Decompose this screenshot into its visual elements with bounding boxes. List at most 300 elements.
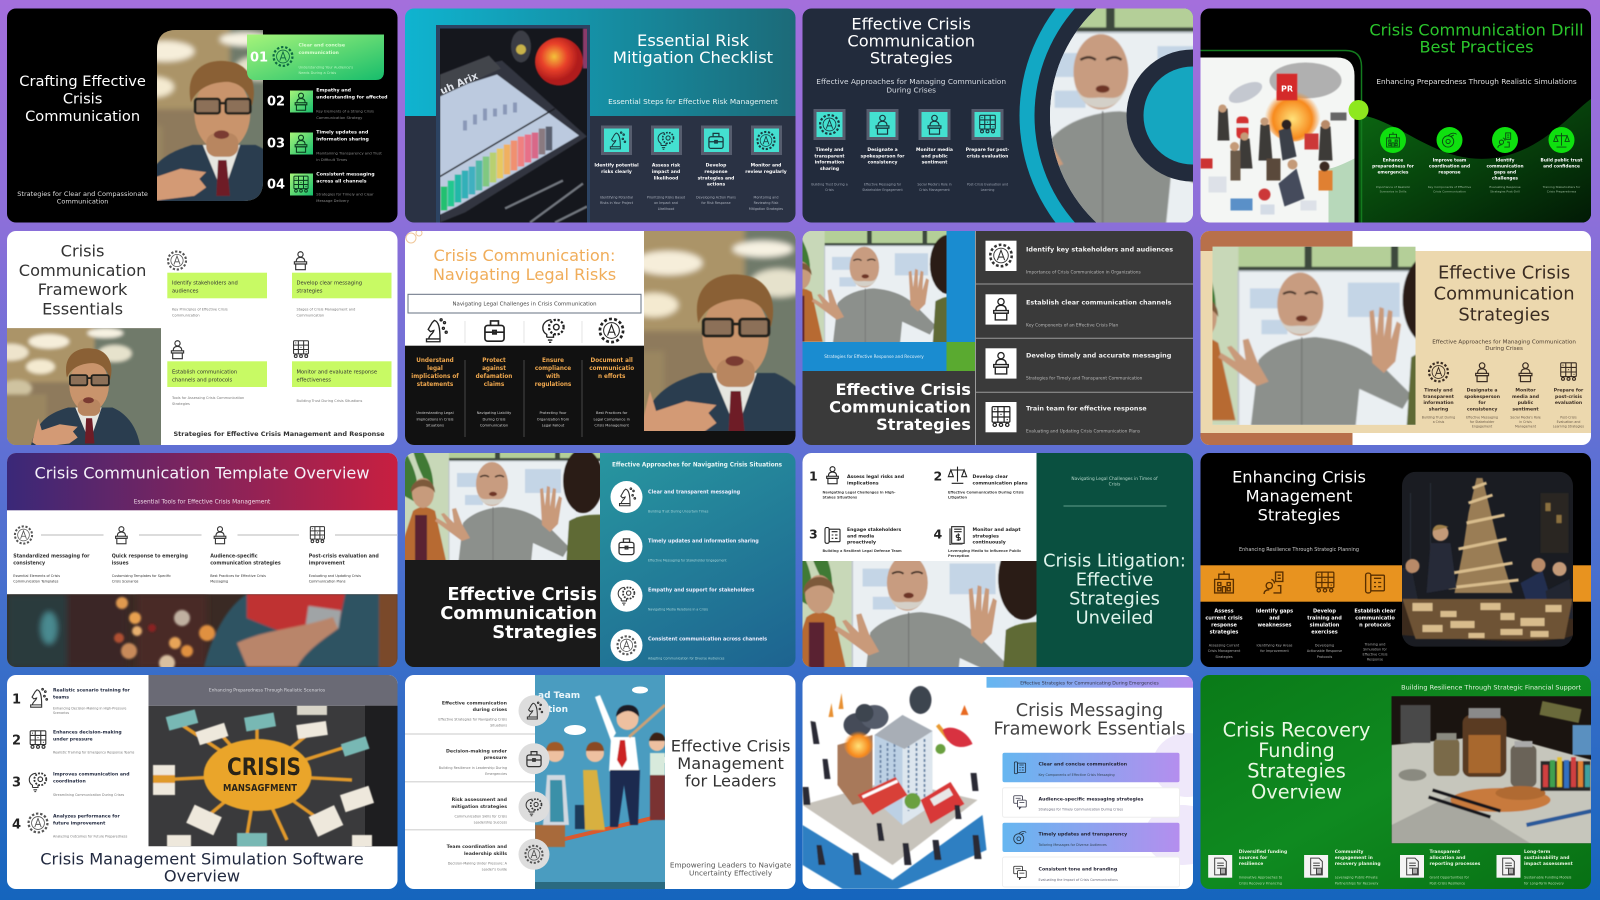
panel: crisis communication framework essentials (7, 231, 398, 445)
title: Strategies (876, 415, 971, 434)
card: clear communication: Clear and concise communication (1038, 762, 1127, 768)
step notes: Management (1515, 425, 1537, 429)
item: diversified funding: Innovative Approaches to (1239, 876, 1282, 880)
title: Crisis Communication: (433, 246, 616, 265)
item 1: teams (53, 695, 69, 701)
panel: crisis recovery funding strategies overview (1200, 675, 1592, 889)
illustration outline (1200, 50, 1362, 222)
panel: crafting effective crisis communication (7, 7, 400, 228)
step notes: Legal Compliance in (594, 417, 630, 421)
step labels: Understand (416, 358, 454, 364)
title: Navigating Legal Risks (433, 265, 616, 284)
list headings: Effective communication (442, 700, 507, 706)
title: Framework (38, 280, 128, 299)
step notes: Key Components of Effective (1428, 185, 1471, 189)
step labels: for (1478, 400, 1487, 406)
item 03: 03 (267, 136, 285, 152)
step notes: Communication Plans (309, 579, 346, 583)
list headings: Team coordination and (447, 844, 507, 850)
step labels: Prepare for post- (966, 147, 1009, 153)
step 2: 2 (934, 469, 942, 484)
item 03: information sharing (316, 136, 369, 142)
step labels: Standardized messaging for (13, 554, 90, 560)
item 04: Consistent messaging (316, 172, 375, 178)
item 4: future improvement (53, 821, 106, 827)
banner: Effective Strategies for Communicating During Emergencies (1020, 680, 1159, 686)
step notes: a Crisis (1433, 420, 1445, 424)
step labels: Enhance (1383, 158, 1403, 164)
step labels: emergencies (1378, 170, 1409, 176)
panel: strategies on beige (1117, 217, 1592, 461)
step notes: Engagement (1472, 425, 1493, 429)
photo: crisis management sign: MANSAGFMENT (223, 783, 297, 794)
step 1: Navigating Legal Challenges in High- (822, 490, 896, 494)
step 3: 3 (809, 526, 818, 541)
step labels: Identify potential (594, 162, 639, 168)
item 04: 04 (267, 178, 285, 192)
panel: crisis litigation (745, 453, 1194, 722)
item: identify stakeholders: Key Principles of Effective Crisis (172, 307, 228, 311)
item: monitor and evaluate: Monitor and evaluate response (296, 369, 377, 375)
banner (986, 677, 1194, 688)
subtitle: Uncertainty Effectively (689, 869, 773, 878)
step labels: Establish clear (1354, 609, 1396, 615)
title: Strategies (1247, 760, 1346, 783)
item: community engagement: Partnerships for Recovery (1335, 881, 1378, 885)
card: updates: Tailoring Messages for Diverse Audiences (1038, 843, 1107, 847)
icon row (426, 319, 623, 343)
title: Communication (19, 261, 146, 280)
step 2: Effective Communication During Crisis (948, 490, 1024, 494)
step notes: Crisis Preparedness (1547, 190, 1577, 194)
title: Effective Crisis (1438, 262, 1570, 283)
icon tiles (814, 109, 1004, 140)
step labels: exercises (1311, 630, 1338, 636)
step labels: public (1518, 400, 1534, 406)
icons (1429, 363, 1576, 382)
step labels: legal (427, 366, 443, 372)
step notes: Effective Messaging (1466, 416, 1498, 420)
step notes: Understanding Legal (416, 411, 454, 415)
title: Crisis Management Simulation Software (40, 849, 364, 868)
step 4: 4 (934, 526, 942, 541)
grey header band (148, 675, 398, 706)
item: diversified funding: resilience (1239, 861, 1263, 867)
step labels: consistency (1467, 406, 1497, 412)
subtitle: During Crises (886, 86, 936, 95)
step labels: strategies (1210, 630, 1238, 636)
title: Communication (1434, 284, 1575, 304)
subtitle box (408, 294, 641, 313)
step labels: Build public trust (1541, 158, 1582, 164)
card: updates: Timely updates and transparency (1038, 832, 1127, 838)
step notes: on Impact and (654, 201, 678, 205)
subtitle box: Navigating Legal Challenges in Crisis Communication (453, 301, 596, 307)
title: for Leaders (685, 772, 776, 791)
step notes: Risks in Your Project (600, 201, 634, 205)
item 03: Maintaining Transparency and Trust (316, 152, 382, 156)
item: identify stakeholders (167, 251, 267, 317)
row: messaging: Clear and transparent messaging (648, 490, 741, 496)
row: stakeholders (986, 241, 1173, 275)
list notes: Communication Skills for Crisis (454, 814, 507, 818)
step notes: Legal Fallout (542, 424, 565, 428)
step 4 (934, 526, 1021, 558)
step notes: Identifying Potential (600, 196, 633, 200)
list notes: Effective Strategies for Navigating Crisis (438, 718, 507, 722)
round icons (1380, 127, 1574, 153)
step labels: and public (921, 153, 948, 159)
step notes: Strategies (1215, 655, 1233, 659)
item: transparent allocation: reporting processes (1430, 861, 1481, 867)
step notes: Crisis Scenarios (112, 579, 139, 583)
step labels: Develop (706, 162, 727, 168)
step labels: Monitor media (916, 147, 953, 153)
step labels: Improve team (1433, 158, 1467, 164)
right circle (1126, 50, 1193, 182)
highlighted item 01: Needs During a Crisis (298, 71, 336, 75)
row: consistency: Consistent communication across channels (648, 637, 767, 643)
photo: man with glasses (157, 30, 263, 201)
photo: speaker (802, 231, 946, 342)
step labels: consistency (13, 561, 46, 567)
step notes: Likelihood (658, 207, 674, 211)
step notes: Messaging (210, 579, 228, 583)
item: channels and protocols (167, 341, 267, 406)
step labels: impact and (652, 169, 680, 175)
step 3: proactively (847, 540, 876, 546)
step labels: Designate a (867, 147, 898, 153)
card: audience-specific: Strategies for Timely Communication During Crises (1038, 808, 1123, 812)
timeline (15, 526, 397, 544)
item: channels and protocols: Tools for Assessing Crisis Communication (171, 396, 244, 400)
photo: speaker (802, 561, 1036, 667)
step notes: Mitigation Strategies (749, 207, 783, 211)
icon band (1215, 571, 1384, 594)
item: messaging strategies: Communication (296, 313, 324, 317)
panel: enhancing crisis management strategies (1200, 453, 1592, 667)
item: messaging strategies: Develop clear messaging (296, 281, 362, 287)
step labels: weaknesses (1258, 623, 1292, 629)
item: monitor and evaluate: effectiveness (296, 377, 331, 383)
step 3: Engage stakeholders (847, 527, 902, 533)
step 3: and media (847, 533, 874, 539)
title: Communication (25, 108, 140, 125)
panel: strategies with dark list (747, 211, 1194, 445)
panel: crisis communication drill best practices (1200, 8, 1592, 222)
step notes: Protocols (1317, 655, 1332, 659)
step labels: communicatio (589, 366, 634, 372)
step labels: spokesperson (1464, 394, 1500, 400)
step notes: Crisis (825, 188, 834, 192)
step notes: Evaluating Response (1489, 185, 1521, 189)
step 1: Assess legal risks and (847, 474, 904, 480)
item: transparent allocation: Transparent (1430, 849, 1461, 855)
card: audience-specific (1002, 788, 1180, 817)
step labels: Timely and (816, 147, 843, 153)
step labels: and (1269, 616, 1280, 622)
step labels: post-crisis (1555, 394, 1582, 400)
row: consistency (610, 629, 767, 661)
step labels: Identify gaps (1256, 609, 1293, 615)
item: long-term sustainability: Sustainable Funding Models (1524, 876, 1572, 880)
panel: crisis communication template overview (7, 453, 398, 671)
illustration: city disaster (802, 686, 986, 889)
illustration: business team climbing: ad Team (538, 691, 580, 701)
row: updates (610, 530, 759, 562)
title: Crisis Recovery (1223, 718, 1370, 741)
item: long-term sustainability: Long-term (1524, 849, 1551, 855)
list notes: Building Resilience in Leadership During (439, 766, 507, 770)
item 3: 3 (12, 776, 21, 791)
row: messaging (986, 348, 1172, 382)
item: diversified funding (1208, 849, 1287, 885)
list headings: Risk assessment and (452, 797, 507, 803)
step labels: Designate a (1467, 388, 1498, 394)
subtitle: Enhancing Resilience Through Strategic Planning (1239, 547, 1359, 553)
item: identify stakeholders: Communication (172, 313, 200, 317)
row: messaging: Develop timely and accurate messaging (1026, 352, 1172, 360)
colour blocks and strapline (802, 231, 976, 371)
step labels: implications of (411, 374, 459, 380)
item 1: 1 (12, 692, 21, 707)
card: tone and branding (1002, 857, 1180, 887)
title: Communication (829, 397, 971, 416)
step labels: Timely and (1424, 388, 1453, 394)
item: long-term sustainability: impact assessment (1524, 861, 1574, 867)
step labels: current crisis (1205, 616, 1243, 622)
step labels: regulations (535, 382, 572, 388)
step labels: Quick response to emerging (112, 554, 189, 560)
step notes: Post-Crisis Evaluation and (967, 182, 1008, 186)
step notes: Organization from (537, 417, 570, 421)
item: community engagement: Community (1335, 849, 1364, 855)
step notes: Situations (426, 424, 444, 428)
item: diversified funding: Crisis Recovery Financing (1239, 881, 1282, 885)
item: community engagement (1304, 849, 1381, 885)
item 2: Realistic Training for Emergency Response Teams (53, 750, 135, 754)
step notes: Crisis Management (1208, 649, 1241, 653)
step labels: media and (1512, 394, 1539, 400)
highlighted item 01: 01 (250, 50, 268, 66)
step labels: consistency (868, 160, 897, 166)
title: Communication (440, 603, 597, 624)
step labels: response (1211, 623, 1237, 629)
item 04 (267, 172, 375, 203)
step labels: spokesperson for (861, 153, 905, 159)
list headings: mitigation strategies (451, 804, 507, 810)
list notes: Situations (490, 724, 507, 728)
step labels: gaps and (1494, 170, 1516, 176)
item 04: Message Delivery (316, 199, 350, 203)
step 2 (934, 467, 1028, 499)
subtitle: Essential Tools for Effective Crisis Management (134, 500, 271, 506)
photo: jars of coins (1392, 696, 1591, 844)
item 04: across all channels (316, 178, 367, 184)
icon tiles (601, 126, 782, 155)
photo: crisis management sign: CRISIS (227, 753, 301, 781)
card: clear communication (1002, 753, 1180, 782)
item 02: Empathy and (316, 88, 351, 94)
step labels: Document all (591, 358, 633, 364)
row: training: Evaluating and Updating Crisis Communication Plans (1026, 429, 1141, 435)
step notes: Post-Crisis (1560, 416, 1577, 420)
subtitle: Communication (57, 198, 108, 206)
step notes: Reviewing Risk (754, 201, 778, 205)
panel: navigating legal risks (405, 211, 946, 471)
item: channels and protocols: Strategies (172, 402, 190, 406)
photo: block tower and team (1402, 472, 1573, 646)
item: channels and protocols: Establish communication (172, 369, 237, 375)
step 1: implications (847, 480, 879, 486)
step notes: Response (1367, 658, 1383, 662)
title: Crisis Litigation: (1043, 551, 1186, 572)
step labels: transparent (1423, 394, 1455, 400)
list headings: pressure (484, 755, 507, 761)
subtitle: Effective Approaches for Managing Communication (1432, 339, 1576, 345)
item: transparent allocation: Grant Opportunities for (1430, 876, 1470, 880)
title: Strategies (1069, 589, 1160, 610)
step labels: preparedness for (1372, 164, 1415, 170)
row: empathy (610, 580, 754, 612)
item 3: Streamlining Communication During Crises (53, 793, 124, 797)
side note: Navigating Legal Challenges in Times of (1071, 476, 1158, 482)
step labels: Develop (1313, 609, 1336, 615)
item 02 (267, 88, 388, 120)
item 03: Timely updates and (316, 130, 368, 136)
step notes: Essential Elements of Crisis (13, 574, 60, 578)
lime dot (1348, 100, 1368, 120)
row: training (986, 402, 1147, 435)
item 4: 4 (12, 817, 21, 832)
step labels: Protect (482, 358, 506, 364)
photo: man with glasses (644, 231, 796, 431)
step notes: Learning Strategies (1553, 425, 1584, 429)
panel: effective crisis communication strategies, teal list (365, 423, 796, 667)
title: Communication (847, 32, 975, 50)
step labels: response (704, 169, 728, 175)
icon circles (518, 695, 550, 870)
title: Crisis Communication Template Overview (35, 463, 369, 482)
item: transparent allocation (1400, 849, 1481, 885)
bottom strapline: Strategies for Effective Crisis Management and Response (174, 430, 385, 438)
panel: effective crisis communication strategies, navy with ring (802, 8, 1193, 222)
item 1: Scenarios (53, 711, 69, 715)
subtitle: Essential Steps for Effective Risk Management (608, 97, 778, 106)
step notes: Best Practices for (596, 411, 628, 415)
highlighted item 01: communication (298, 50, 339, 56)
card: tone and branding: Evaluating the Impact of Crisis Communications (1038, 878, 1118, 882)
step notes: Evaluation and (1557, 420, 1580, 424)
row: empathy: Empathy and support for stakeholders (648, 588, 754, 594)
step 2: Develop clear (972, 474, 1009, 480)
step notes: Developing Action Plans (696, 196, 736, 200)
row: updates: Timely updates and information sharing (648, 539, 759, 545)
step notes: for Stakeholder (1470, 420, 1495, 424)
item: transparent allocation: Post-Crisis Resilience (1430, 881, 1465, 885)
title: Management (677, 754, 784, 773)
title: Crisis (61, 242, 105, 261)
item: long-term sustainability: for Long-Term Recovery (1524, 881, 1564, 885)
item: channels and protocols: channels and protocols (172, 377, 232, 383)
step labels: statements (417, 382, 454, 388)
title: Overview (164, 867, 240, 886)
step labels: crisis evaluation (967, 153, 1008, 159)
step notes: Training Stakeholders for (1542, 185, 1581, 189)
step notes: Evaluating and Updating Crisis (309, 574, 361, 578)
step labels: claims (484, 382, 505, 388)
step 2: Litigation (948, 495, 967, 499)
illustration: crisis PR chaos (1200, 58, 1354, 222)
title: Effective Crisis (671, 737, 790, 756)
title: Effective Crisis (835, 380, 971, 399)
photo: tablet chart and apple (436, 25, 591, 223)
decorative teal ring (1020, 8, 1193, 222)
step notes: Training and (1364, 643, 1385, 647)
step notes: Crisis Management (919, 188, 951, 192)
item 3 (12, 772, 130, 797)
item 2: 2 (12, 733, 21, 748)
step notes: Actionable Response (1307, 649, 1342, 653)
item 02: Key Elements of a Strong Crisis (316, 110, 374, 114)
title: Effective (1076, 570, 1153, 591)
title: Overview (1251, 780, 1342, 803)
illustration: business team climbing (535, 675, 665, 889)
title: Enhancing Crisis (1232, 468, 1366, 487)
title: Framework Essentials (993, 719, 1186, 739)
step notes: Crisis Communication (1433, 190, 1466, 194)
step notes: Effective Crisis (1362, 653, 1388, 657)
step labels: Monitor (1515, 388, 1536, 394)
step 1: Stakes Situations (822, 495, 857, 499)
panel: crisis management simulation software overview (7, 675, 398, 889)
row: stakeholders: Importance of Crisis Communication in Organizations (1026, 269, 1141, 275)
column dividers (465, 360, 582, 437)
step labels: evaluation (1555, 400, 1582, 406)
item: transparent allocation: allocation and (1430, 855, 1465, 861)
green wave (1358, 98, 1592, 222)
item: community engagement: recovery planning (1335, 861, 1381, 867)
item 02: Communication Strategy (316, 116, 363, 120)
step labels: sharing (820, 166, 839, 172)
row: channels: Establish clear communication channels (1026, 298, 1172, 306)
step notes: Building Trust During (1422, 416, 1455, 420)
step labels: Post-crisis evaluation and (309, 554, 379, 560)
step labels: n protocols (1359, 623, 1391, 629)
step notes: Best Practices for Effective Crisis (210, 574, 266, 578)
list notes: Decision-Making Under Pressure: A (448, 861, 508, 865)
step notes: Stakeholder Engagement (862, 188, 903, 192)
step labels: actions (707, 182, 726, 188)
step labels: strategies and (698, 175, 734, 181)
row: messaging (610, 481, 741, 513)
panel: essential risk mitigation checklist (405, 8, 796, 223)
step labels: coordination and (1429, 164, 1470, 170)
step labels: issues (112, 561, 129, 567)
step labels: sharing (1429, 406, 1448, 412)
item: long-term sustainability: sustainability and (1524, 855, 1570, 861)
title: Essentials (42, 299, 123, 318)
title: Effective Crisis (447, 584, 597, 605)
step notes: Identifying Key Areas (1257, 643, 1293, 647)
photo: crisis management sign (148, 706, 398, 846)
step notes: in Crisis (1519, 420, 1532, 424)
title: Best Practices (1419, 38, 1534, 56)
item: diversified funding: sources for (1239, 855, 1268, 861)
photo: speaker close-up (1050, 8, 1193, 222)
step labels: against (482, 366, 506, 372)
photo: crossed arms with bokeh (7, 594, 398, 667)
